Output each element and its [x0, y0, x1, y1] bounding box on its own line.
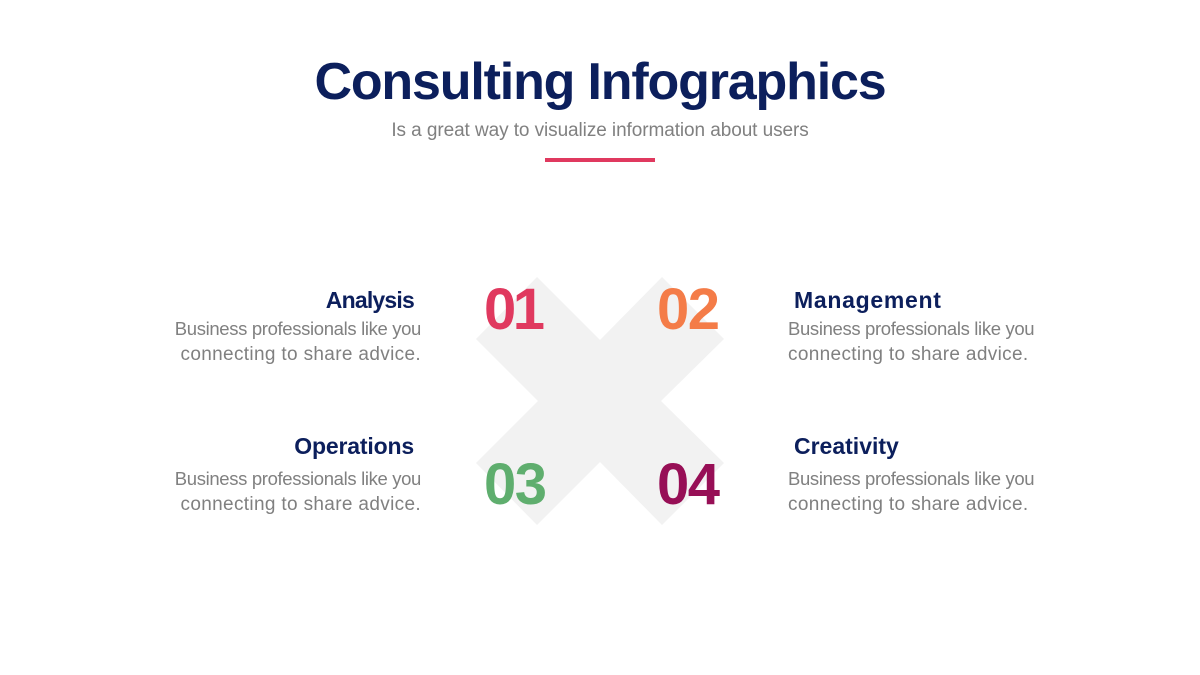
title: Consulting Infographics — [314, 53, 886, 111]
text: management: Business professionals like you — [788, 318, 1034, 339]
heading: operations: Operations — [294, 433, 414, 459]
text: analysis — [175, 318, 421, 365]
text: management: connecting to share advice. — [788, 344, 1028, 365]
text: creativity: Business professionals like you — [788, 468, 1034, 489]
number 02: 02 — [657, 277, 719, 342]
text: operations — [175, 468, 421, 515]
text: analysis: Business professionals like you — [175, 318, 421, 339]
number 04: 04 — [657, 452, 719, 517]
text: management — [788, 318, 1034, 365]
text: operations: Business professionals like you — [175, 468, 421, 489]
text: creativity — [788, 468, 1034, 515]
title underline — [545, 158, 655, 162]
heading: creativity: Creativity — [794, 433, 899, 459]
text: analysis: connecting to share advice. — [180, 344, 421, 365]
number 01: 01 — [484, 277, 542, 342]
heading: analysis: Analysis — [326, 287, 414, 313]
text: creativity: connecting to share advice. — [788, 494, 1028, 515]
text: operations: connecting to share advice. — [180, 494, 421, 515]
number 03: 03 — [484, 452, 546, 517]
subtitle: Is a great way to visualize information about users — [391, 120, 809, 141]
heading: management: Management — [794, 287, 942, 313]
